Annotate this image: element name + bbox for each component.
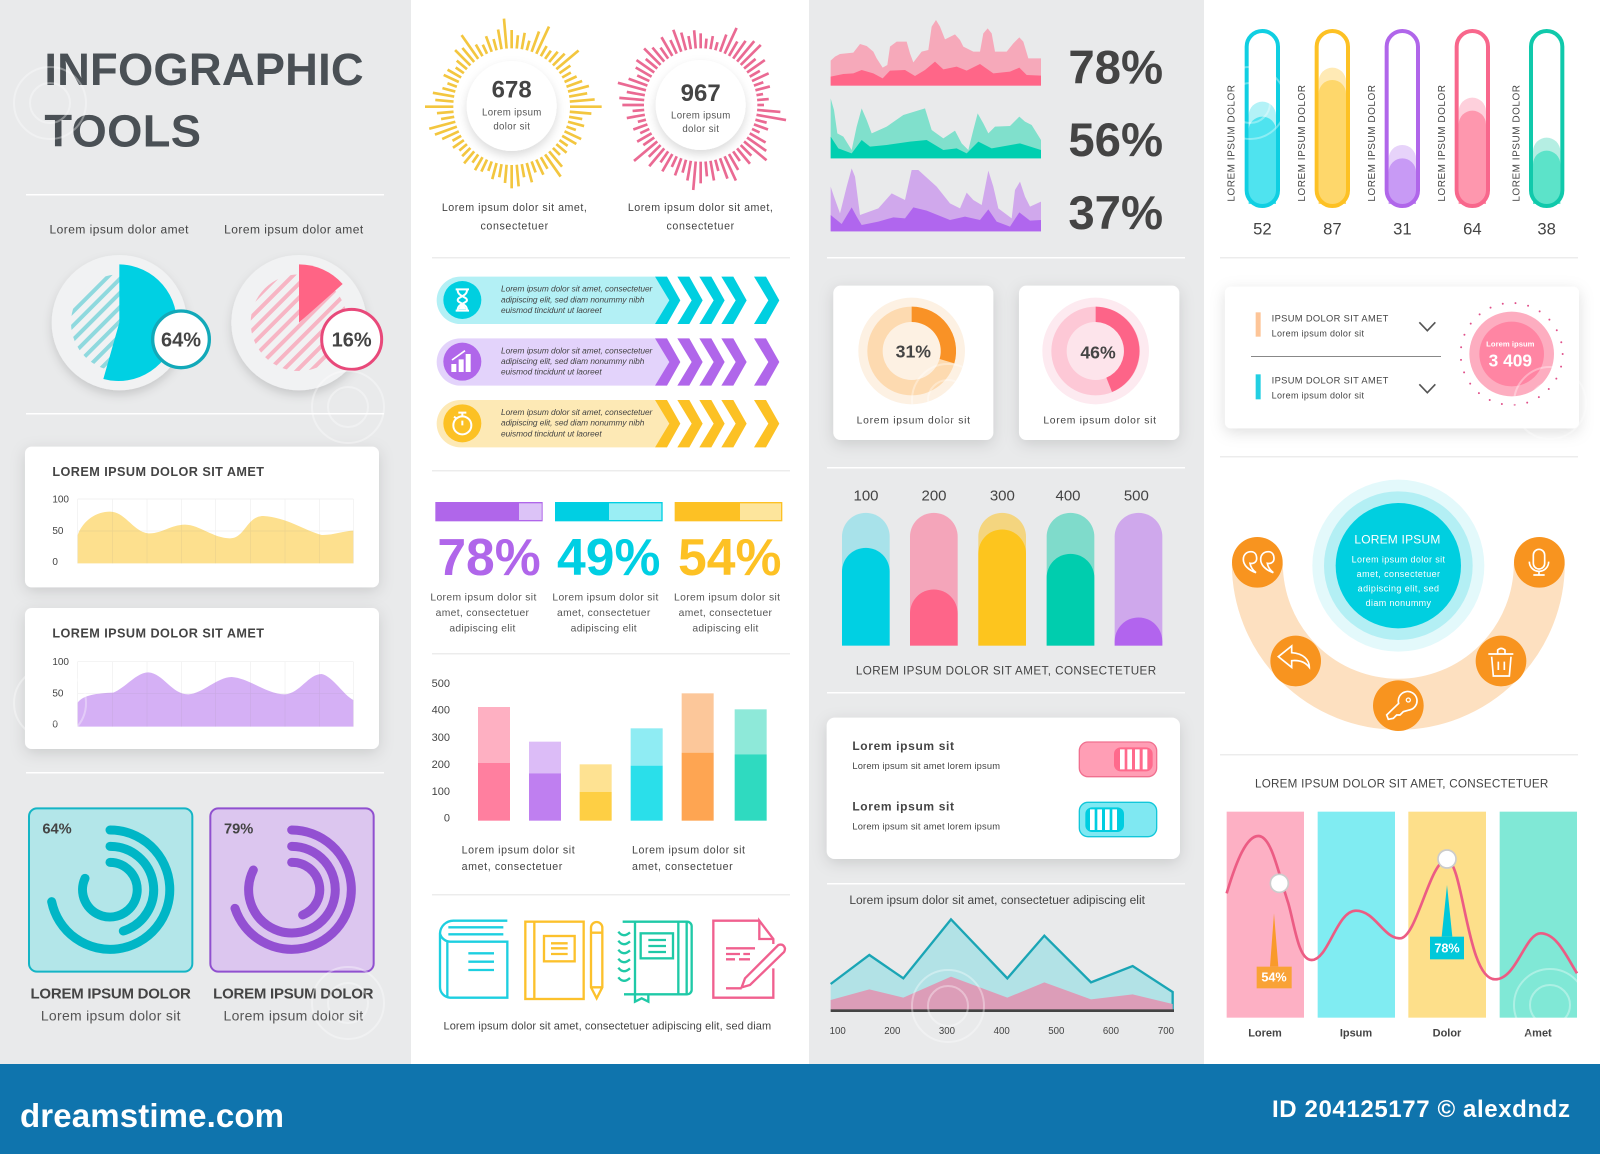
area chart: green 56%: 56%: [1068, 114, 1163, 167]
panel: small area charts with percentages: [831, 20, 1163, 240]
toggle: cyan: [1079, 802, 1157, 837]
card: toggles: [827, 718, 1180, 859]
column labels: Amet: [1524, 1028, 1552, 1040]
card: purple rings 79%: [210, 808, 374, 1024]
mountain area chart: 300: [939, 1026, 955, 1037]
gauge 38: [1511, 31, 1562, 238]
panel: sunburst gauges and arrow bars: [425, 19, 786, 447]
stat: 49% cyan: [552, 502, 663, 634]
icon: book: [440, 921, 507, 998]
icon: notebook and pencil: [525, 922, 602, 999]
card: donut 31%: Lorem ipsum dolor sit: [857, 416, 970, 427]
rounded bar chart: 100: [853, 488, 879, 505]
title: [44, 44, 364, 157]
bars caption: LOREM IPSUM DOLOR SIT AMET, CONSECTETUER: [856, 664, 1156, 677]
icon: key: [1373, 680, 1424, 731]
column labels: Ipsum: [1340, 1028, 1372, 1040]
card: donut 46%: [1019, 286, 1179, 440]
rounded bar chart: 500: [1124, 488, 1149, 505]
gauge 64: [1437, 31, 1488, 238]
counter 3 409: [1461, 303, 1563, 405]
trend line: [1227, 836, 1577, 979]
chart captions: Lorem ipsum dolor sit: [632, 844, 745, 856]
icon: stopwatch: [443, 404, 481, 442]
toggle: pink: [1079, 742, 1157, 777]
panel: area chart cards: [25, 447, 379, 749]
column labels: Dolor: [1433, 1028, 1462, 1040]
stat: 49% cyan: amet, consectetuer: [557, 608, 651, 619]
stat: 49% cyan: adipiscing elit: [571, 623, 637, 634]
card: list with counter: [1225, 287, 1579, 428]
card: yellow area chart: 50: [52, 526, 64, 537]
mountain area chart: 600: [1103, 1026, 1119, 1037]
gauge 31: LOREM IPSUM DOLOR: [1367, 85, 1378, 202]
card: purple area chart: 0: [52, 720, 58, 731]
card: list with counter: Lorem ipsum dolor sit: [1272, 391, 1364, 401]
area chart: green 56%: [831, 98, 1163, 167]
mountain area chart: 500: [1048, 1026, 1064, 1037]
title: TOOLS: [44, 106, 201, 157]
area chart: purple 37%: 37%: [1068, 187, 1163, 240]
arrow bar: purple: euismod tincidunt ut laoreet: [501, 367, 602, 377]
card: teal rings 64%: LOREM IPSUM DOLOR: [30, 985, 191, 1002]
arrow bar: yellow: euismod tincidunt ut laoreet: [501, 428, 602, 438]
gauge 52: [1226, 31, 1278, 238]
radial menu: diam nonummy: [1366, 598, 1431, 608]
panel: line over column chart: [1227, 777, 1577, 1040]
gauge 87: [1297, 31, 1348, 238]
card: toggles: Lorem ipsum sit amet lorem ipsum: [852, 761, 1000, 771]
gauge 87: LOREM IPSUM DOLOR: [1297, 85, 1308, 202]
footer banner: ID 204125177 © alexdndz: [1272, 1096, 1570, 1123]
chart captions: [462, 844, 745, 873]
panel: title and pie charts: [44, 44, 382, 390]
footer banner: dreamstime.com: [20, 1097, 284, 1134]
arrow bar: cyan: Lorem ipsum dolor sit amet, consectetuer: [501, 284, 654, 294]
stacked bar chart: 200: [432, 759, 450, 771]
callout 54%: [1257, 874, 1292, 988]
counter 3 409: Lorem ipsum: [1486, 340, 1535, 349]
pie chart 16%: Lorem ipsum dolor amet: [224, 222, 364, 236]
stat: 54% yellow: adipiscing elit: [692, 623, 758, 634]
card: purple area chart: LOREM IPSUM DOLOR SIT AMET: [52, 626, 264, 640]
arrow bar: yellow: [437, 400, 779, 447]
card: yellow area chart: [25, 447, 379, 587]
radial menu: LOREM IPSUM: [1354, 532, 1440, 546]
stat: 78% purple: Lorem ipsum dolor sit: [430, 593, 536, 604]
gauge 38: 38: [1537, 219, 1556, 238]
card: teal rings 64%: [29, 808, 192, 1024]
mountain area chart: Lorem ipsum dolor sit amet, consectetuer adipiscing elit: [849, 893, 1146, 907]
arrow bar: purple: adipiscing elit, sed diam nonummy nibh: [501, 356, 645, 366]
panel: vertical gauges: [1226, 31, 1562, 238]
card: purple area chart: [25, 608, 379, 749]
sunburst gauge 967: Lorem ipsum dolor sit amet,: [628, 202, 773, 214]
icons caption: Lorem ipsum dolor sit amet, consectetuer adipiscing elit, sed diam: [443, 1020, 771, 1032]
card: yellow area chart: LOREM IPSUM DOLOR SIT AMET: [52, 465, 264, 479]
stacked bar chart: 100: [432, 786, 450, 798]
column labels: [1248, 1028, 1552, 1040]
stat: 49% cyan: 49%: [557, 528, 660, 586]
stacked bar chart: 500: [432, 678, 450, 690]
stat: 54% yellow: Lorem ipsum dolor sit: [674, 593, 780, 604]
card: purple rings 79%: 79%: [224, 821, 253, 837]
arrow bar: purple: Lorem ipsum dolor sit amet, consectetuer: [501, 345, 654, 355]
gauge 38: LOREM IPSUM DOLOR: [1511, 85, 1522, 202]
stacked bar chart: 300: [432, 732, 450, 744]
arrow bar: cyan: [437, 277, 779, 324]
chart heading: LOREM IPSUM DOLOR SIT AMET, CONSECTETUER: [1255, 777, 1548, 790]
icon: spiral notebook: [618, 922, 692, 1002]
pie chart 16%: 16%: [332, 330, 372, 352]
arrow bar: yellow: Lorem ipsum dolor sit amet, consectetuer: [501, 407, 654, 417]
rounded bar chart: 300: [990, 488, 1015, 505]
card: toggles: Lorem ipsum sit amet lorem ipsum: [852, 821, 1000, 831]
sunburst gauge 678: consectetuer: [480, 220, 549, 232]
mountain area chart: [830, 893, 1174, 1037]
panel: toggles and mountain chart: [827, 718, 1180, 1037]
column labels: Lorem: [1248, 1028, 1282, 1040]
sunburst gauge 678: [425, 19, 602, 232]
radial menu: adipiscing elit, sed: [1358, 584, 1439, 594]
stat: 49% cyan: Lorem ipsum dolor sit: [552, 593, 658, 604]
mountain area chart: 100: [830, 1026, 846, 1037]
card: teal rings 64%: Lorem ipsum dolor sit: [41, 1008, 181, 1024]
sunburst gauge 967: [618, 28, 786, 232]
sunburst gauge 967: dolor sit: [682, 124, 719, 135]
footer banner: [0, 1064, 1600, 1154]
rounded bar chart: 200: [921, 488, 947, 505]
card: purple area chart: 100: [52, 657, 69, 668]
panel: line icons: [440, 921, 785, 1032]
stat: 78% purple: 78%: [437, 528, 541, 586]
icon: quotes: [1232, 537, 1283, 588]
card: purple area chart: 50: [52, 689, 64, 700]
title: INFOGRAPHIC: [44, 44, 364, 95]
chart captions: amet, consectetuer: [462, 861, 563, 873]
area chart: pink 78%: [831, 20, 1163, 94]
arrow bar: cyan: euismod tincidunt ut laoreet: [501, 305, 602, 315]
sunburst gauge 967: 967: [681, 80, 721, 107]
card: donut 31%: 31%: [896, 341, 931, 361]
rounded bar chart: 400: [1055, 488, 1081, 505]
panel: percent bars and stacked chart: [430, 502, 782, 873]
sunburst gauge 678: 678: [492, 77, 532, 104]
card: purple rings 79%: Lorem ipsum dolor sit: [223, 1008, 363, 1024]
gauge 64: LOREM IPSUM DOLOR: [1437, 85, 1448, 202]
chart captions: Lorem ipsum dolor sit: [462, 844, 575, 856]
pie chart 64%: 64%: [161, 330, 201, 352]
card: toggles: Lorem ipsum sit: [852, 739, 954, 753]
arrow bar: purple: [437, 338, 779, 386]
icon: hourglass: [443, 281, 481, 319]
mountain area chart: 400: [994, 1026, 1010, 1037]
panel: info card and radial menu: [1225, 287, 1579, 731]
callout 78%: [1430, 850, 1464, 959]
gauge 31: [1367, 31, 1418, 238]
card: toggles: Lorem ipsum sit: [852, 800, 954, 814]
stat: 54% yellow: 54%: [678, 528, 781, 586]
radial menu: Lorem ipsum dolor sit: [1352, 554, 1445, 564]
sunburst gauge 678: dolor sit: [493, 121, 530, 132]
arrow bar: yellow: adipiscing elit, sed diam nonummy nibh: [501, 418, 645, 428]
card: donut 46%: 46%: [1080, 342, 1116, 362]
radial menu: [1232, 480, 1565, 731]
mountain area chart: 700: [1158, 1026, 1174, 1037]
stacked bar chart: [432, 678, 767, 825]
stat: 54% yellow: [674, 502, 782, 634]
pie chart 16%: [224, 222, 382, 390]
sunburst gauge 678: Lorem ipsum: [482, 108, 541, 119]
stat: 54% yellow: amet, consectetuer: [679, 608, 773, 619]
card: donut 46%: Lorem ipsum dolor sit: [1043, 416, 1156, 427]
panel: donut cards and rounded bars: [833, 286, 1179, 677]
gauge 64: 64: [1463, 219, 1482, 238]
icon: document and pen: [713, 921, 785, 998]
panel: radial ring cards: [29, 808, 374, 1024]
columns: [1227, 812, 1577, 1018]
mountain area chart: 200: [884, 1026, 900, 1037]
stat: 78% purple: adipiscing elit: [449, 623, 515, 634]
icon: trash: [1476, 636, 1526, 686]
chart captions: amet, consectetuer: [632, 861, 733, 873]
stat: 78% purple: [430, 502, 543, 634]
card: yellow area chart: 100: [52, 494, 69, 505]
area chart: purple 37%: [831, 168, 1163, 240]
gauge 87: 87: [1323, 219, 1342, 238]
sunburst gauge 678: Lorem ipsum dolor sit amet,: [442, 202, 587, 214]
stacked bar chart: 400: [432, 704, 450, 716]
card: list with counter: Lorem ipsum dolor sit: [1272, 329, 1364, 339]
radial menu: amet, consectetuer: [1357, 569, 1440, 579]
icon: bar chart: [443, 343, 481, 381]
callout 54%: 54%: [1261, 971, 1287, 985]
icon: microphone: [1514, 537, 1565, 588]
pie chart 64%: Lorem ipsum dolor amet: [49, 222, 189, 236]
stacked bar chart: 0: [444, 813, 450, 825]
card: yellow area chart: 0: [52, 557, 58, 568]
icon: reply arrow: [1270, 636, 1321, 686]
stat: 78% purple: amet, consectetuer: [436, 608, 530, 619]
pie chart 64%: [49, 222, 209, 390]
area chart: pink 78%: 78%: [1068, 41, 1163, 94]
counter 3 409: 3 409: [1489, 351, 1532, 371]
sunburst gauge 967: Lorem ipsum: [671, 110, 730, 121]
sunburst gauge 967: consectetuer: [666, 220, 735, 232]
gauge 31: 31: [1393, 219, 1412, 238]
rounded bar chart: [842, 488, 1162, 646]
card: list with counter: IPSUM DOLOR SIT AMET: [1272, 376, 1389, 386]
card: donut 31%: [833, 286, 993, 440]
card: purple rings 79%: LOREM IPSUM DOLOR: [213, 985, 374, 1002]
gauge 52: 52: [1253, 219, 1272, 238]
card: teal rings 64%: 64%: [42, 821, 72, 837]
callout 78%: 78%: [1434, 941, 1460, 955]
card: list with counter: IPSUM DOLOR SIT AMET: [1272, 314, 1389, 324]
gauge 52: LOREM IPSUM DOLOR: [1226, 85, 1237, 202]
arrow bar: cyan: adipiscing elit, sed diam nonummy nibh: [501, 294, 645, 304]
